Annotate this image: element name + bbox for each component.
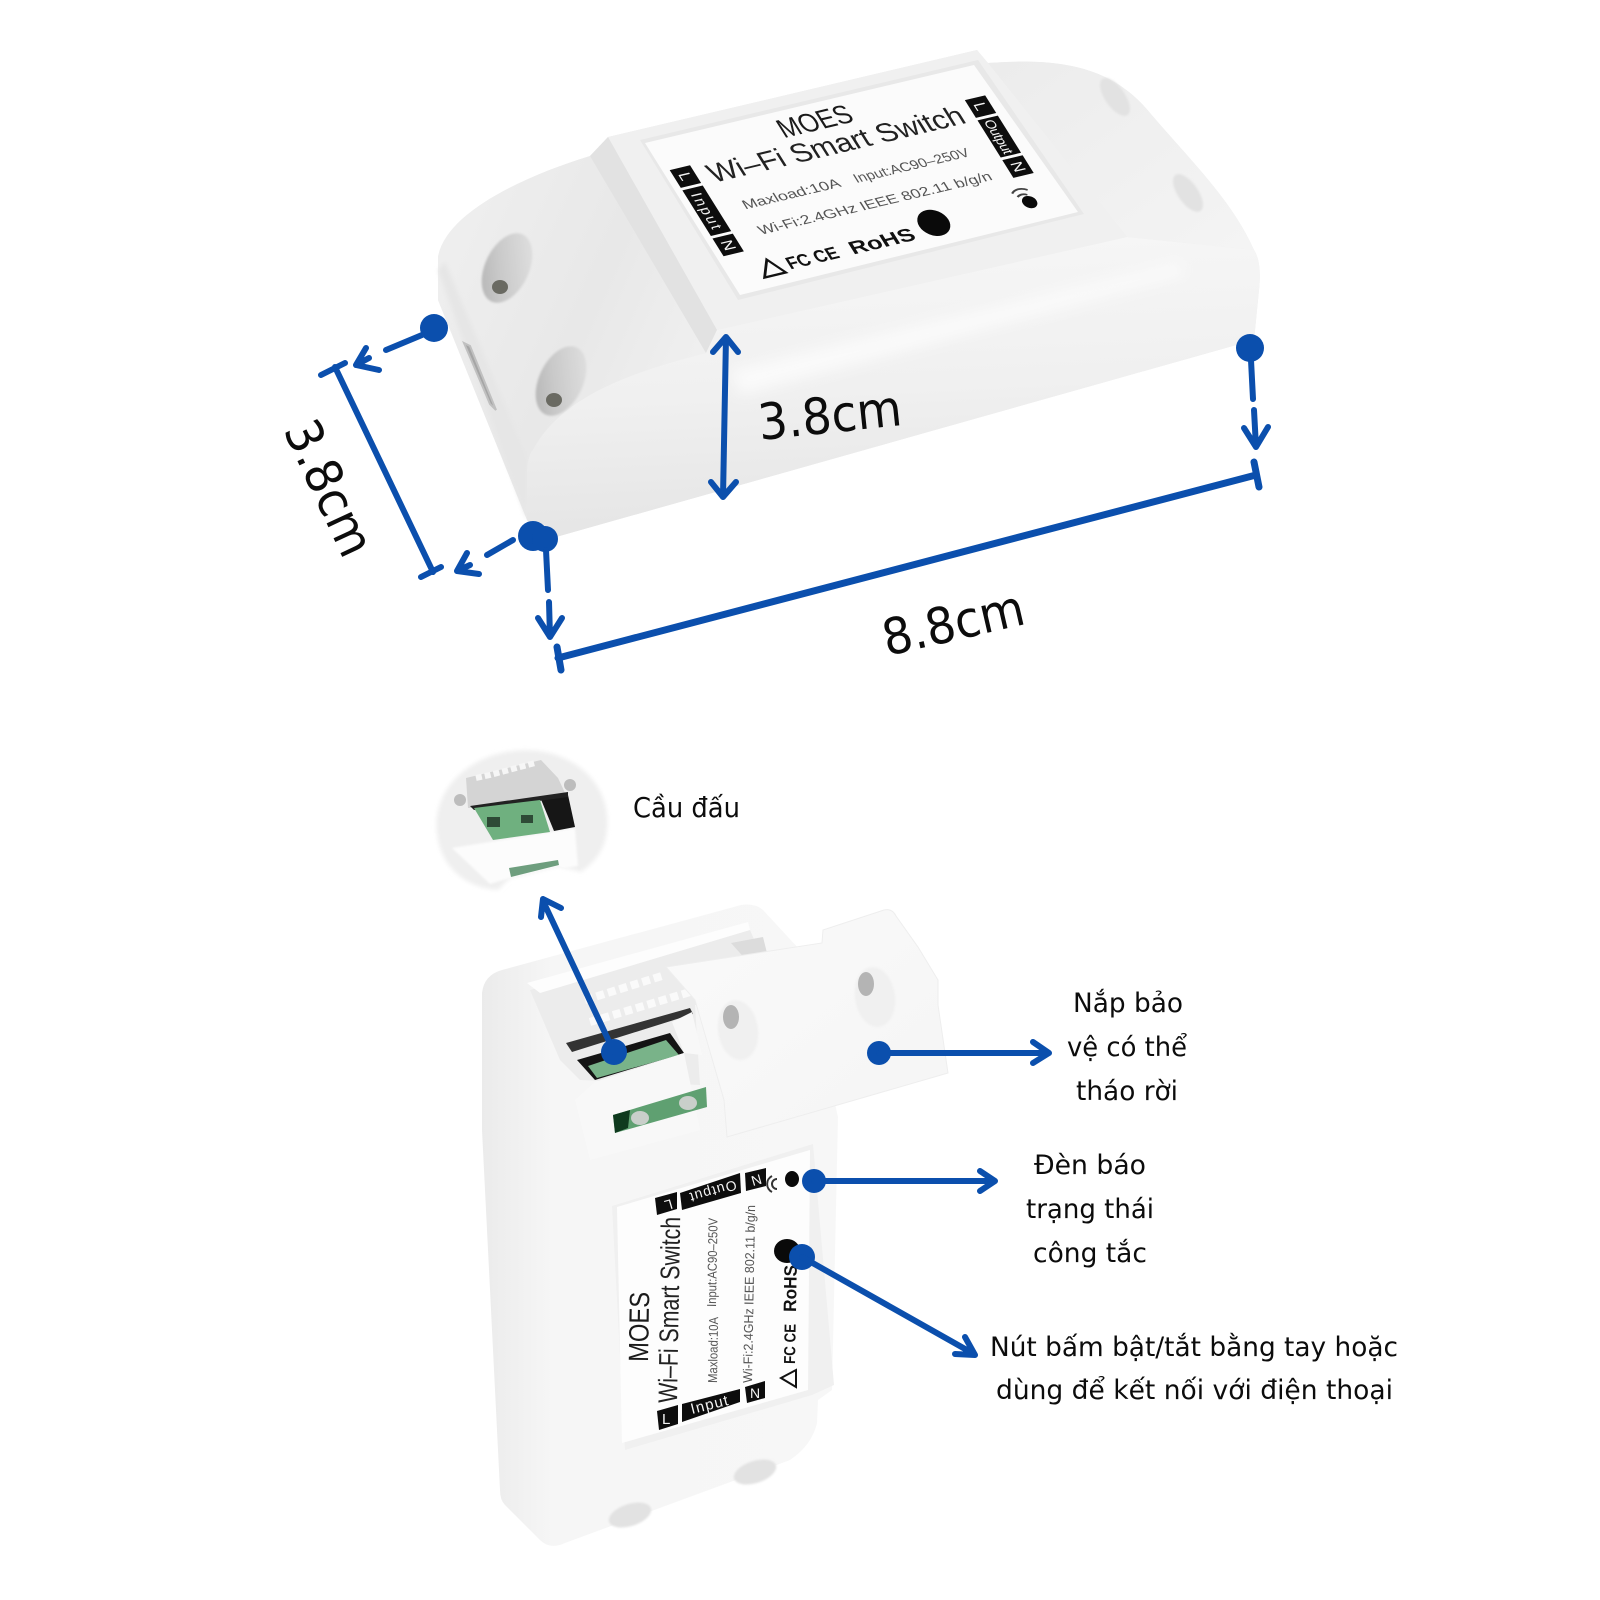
label: removable cover: vệ có thể xyxy=(1067,1032,1187,1063)
input spec: Input:AC90–250V xyxy=(850,145,973,186)
left slot xyxy=(464,343,496,410)
specs: Maxload:10A xyxy=(705,1317,721,1383)
wifi icon xyxy=(767,1176,777,1192)
top tags: L xyxy=(662,1196,675,1214)
top tags: N xyxy=(749,1171,764,1189)
panel bevel xyxy=(590,137,717,353)
center raised panel xyxy=(608,50,1127,330)
right end cap xyxy=(988,62,1254,250)
right tags: N xyxy=(1006,160,1029,174)
removable cover xyxy=(666,910,948,1137)
button xyxy=(774,1239,800,1263)
white lower face xyxy=(452,828,578,884)
right cap screw holes xyxy=(1094,73,1209,217)
callout arrow: removable cover xyxy=(867,1041,1049,1065)
warning triangle xyxy=(781,1370,796,1387)
terminal opening xyxy=(530,930,780,1085)
right tags: Output xyxy=(980,118,1017,156)
rear window xyxy=(731,937,768,962)
body xyxy=(482,905,838,1546)
product title: Wi–Fi Smart Switch xyxy=(701,101,972,189)
specs: Maxload:10A xyxy=(738,175,845,212)
dimension: height 3.8cm: 3.8cm xyxy=(755,379,904,452)
label: button xyxy=(990,1332,1398,1406)
dimension: length 8.8cm xyxy=(457,334,1268,670)
dimension: depth 3.8cm xyxy=(272,314,448,577)
label: removable cover: tháo rời xyxy=(1076,1076,1178,1107)
bottom tags xyxy=(657,1381,765,1430)
warning triangle xyxy=(755,257,786,278)
label: status LED: công tắc xyxy=(1033,1238,1147,1269)
left face shade xyxy=(438,262,527,520)
label: removable cover xyxy=(1067,988,1187,1107)
device label rear xyxy=(617,1150,810,1443)
raised label panel xyxy=(612,1144,834,1450)
FC CE: FC CE xyxy=(782,1324,800,1364)
label content skewed to the panel xyxy=(654,70,1057,286)
left tags: L xyxy=(674,171,695,183)
opening rim xyxy=(527,922,750,993)
dimension: depth 3.8cm: 3.8cm xyxy=(272,411,386,566)
top tags: Output xyxy=(688,1177,739,1206)
LED xyxy=(1019,195,1040,210)
label: status LED: Đèn báo xyxy=(1034,1150,1146,1181)
inset contents xyxy=(452,760,578,884)
button xyxy=(911,207,956,239)
callout arrow: status LED xyxy=(802,1169,995,1193)
ridges xyxy=(585,975,690,1022)
left end cap xyxy=(438,156,706,520)
bottom tags: L xyxy=(662,1411,670,1428)
wifi icon xyxy=(1011,187,1030,198)
device label xyxy=(640,60,1084,300)
dimension: length 8.8cm: 8.8cm xyxy=(877,579,1030,668)
FC CE marks: FC CE xyxy=(782,244,844,274)
body silhouette xyxy=(438,50,1260,538)
black block xyxy=(540,795,575,831)
ridged housing xyxy=(466,760,566,808)
right tags xyxy=(965,95,1034,178)
label: status LED xyxy=(1026,1150,1154,1269)
left tags: N xyxy=(716,239,739,252)
label: status LED: trạng thái xyxy=(1026,1194,1154,1225)
screw hole 2 xyxy=(525,338,597,424)
input spec: Input:AC90–250V xyxy=(704,1218,721,1307)
green terminal xyxy=(474,800,550,840)
bottom holes xyxy=(606,1455,779,1532)
brand: MOES xyxy=(623,1292,655,1362)
product title: Wi–Fi Smart Switch xyxy=(653,1217,686,1403)
brand: MOES xyxy=(771,100,859,144)
top tags xyxy=(655,1168,766,1215)
bottom tags: N xyxy=(750,1385,760,1401)
product photo: top view of switch xyxy=(438,50,1260,538)
label: terminal block: Cầu đấu xyxy=(633,791,740,824)
lower terminal xyxy=(613,1087,707,1133)
front face xyxy=(527,237,1260,538)
product photo: inset of terminal block xyxy=(437,750,607,890)
front highlight xyxy=(730,262,1185,395)
infographic canvas xyxy=(286,50,1396,1546)
bottom tags: Input xyxy=(689,1392,731,1418)
dark gap xyxy=(566,1008,693,1052)
LED xyxy=(785,1171,799,1187)
RoHS mark: RoHS xyxy=(845,225,920,259)
front wall xyxy=(575,1053,700,1160)
wifi spec: Wi-Fi:2.4GHz IEEE 802.11 b/g/n xyxy=(740,1205,758,1383)
product photo: back view of switch with removable cover xyxy=(482,905,948,1546)
dimension: height 3.8cm xyxy=(711,337,904,497)
label: button: Nút bấm bật/tắt bằng tay hoặc xyxy=(990,1332,1398,1363)
left tags xyxy=(670,165,744,256)
wifi spec: Wi-Fi:2.4GHz IEEE 802.11 b/g/n xyxy=(754,169,995,237)
upper terminal xyxy=(577,1033,684,1080)
right tags: L xyxy=(969,101,990,113)
cover holes xyxy=(714,965,899,1062)
label: removable cover: Nắp bảo xyxy=(1073,988,1183,1019)
inset disc xyxy=(437,750,607,890)
white tab xyxy=(672,1012,702,1055)
RoHS: RoHS xyxy=(780,1265,801,1312)
callout arrow: button xyxy=(789,1244,975,1355)
label: button: dùng để kết nối với điện thoại xyxy=(996,1375,1393,1406)
callout arrow: terminal block xyxy=(541,899,627,1065)
left tags: Input xyxy=(687,191,726,231)
screw hole 1 xyxy=(471,225,543,311)
